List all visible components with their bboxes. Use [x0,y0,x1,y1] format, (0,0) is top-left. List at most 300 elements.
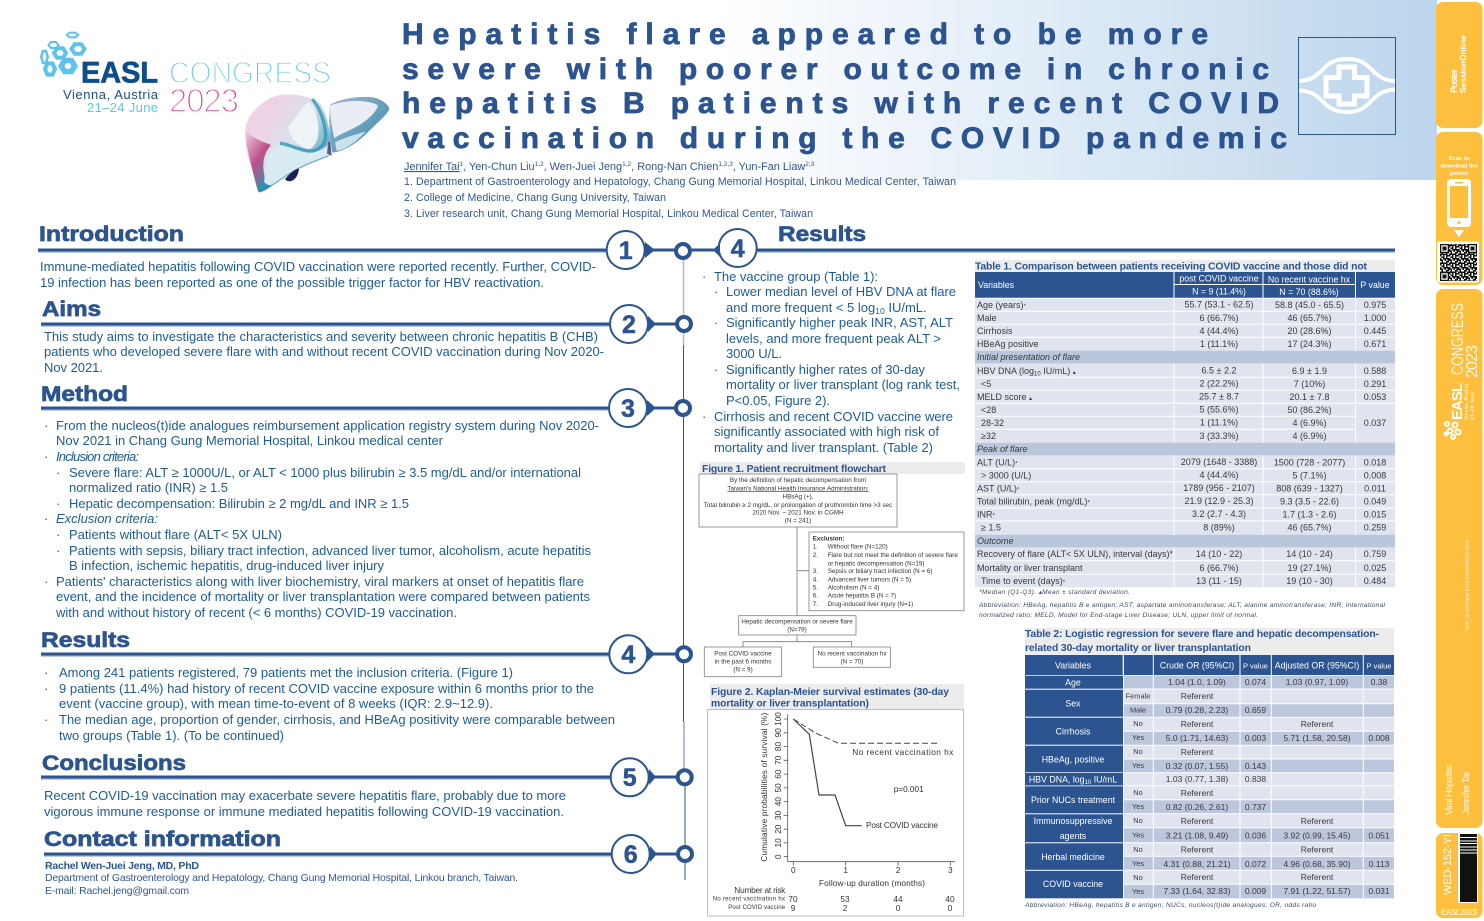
sidebar year: 2023 [1464,345,1481,378]
sidebar author: Jennifer Tai [1461,772,1471,815]
table 1 variable column: <28 [981,405,996,415]
barcode [1458,833,1478,903]
table 2 crude OR column: 5.0 (1.71, 14.63) [1166,733,1228,743]
text block: results continued: · [702,269,706,284]
text block: results [44,665,615,743]
table 1 variable column: > 3000 (U/L) [981,470,1031,480]
table 1 variable column: IU/mL) [1041,366,1073,376]
badge 6: 6 [624,841,638,869]
table 1 post COVID vaccine column: 21.9 (12.9 - 25.3) [1184,496,1254,506]
text block: results: Among 241 patients registered, 79 patients met the inclusion criteria. (Figure 1) [59,665,513,680]
text block: results continued: P<0.05, Figure 2). [726,393,830,408]
table 1 no recent vaccine column: 5 (7.1%) [1292,470,1327,480]
flowchart box: no recent vaccination: No recent vaccination hx [818,650,887,657]
table 1 post COVID vaccine column: 14 (10 - 22) [1196,549,1242,559]
flowchart box: post COVID vaccine: (N = 9) [733,666,753,673]
flowchart box: exclusion: 1. [813,544,818,551]
table 1 post COVID vaccine column: 3.2 (2.7 - 4.3) [1192,509,1246,519]
text block: conclusions: Recent COVID-19 vaccination may exacerbate severe hepatitis flare, probably due to more [44,788,566,803]
table 2 crude p value column: 0.074 [1245,677,1266,687]
table 2 variable column: HBeAg, positive [1042,754,1104,764]
sidebar panel: poster session online [1436,2,1482,128]
section: Introduction [39,223,596,290]
title [402,18,1287,155]
text block: results continued: Significantly higher rates of 30-day [726,362,926,377]
table 2 crude OR column: 1.04 (1.0, 1.09) [1168,677,1226,687]
table 2 crude p value column: 0.659 [1245,705,1266,715]
table 2 variable column: agents [1060,831,1087,841]
table 2 subgroup column [1126,692,1150,896]
table 2 crude p value column: 0.737 [1245,802,1266,812]
number at risk table: 44 [893,894,903,904]
text block: results: 9 patients (11.4%) had history of recent COVID vaccine exposure within 6 months prior to the [59,681,594,696]
table 2 crude p value column: 0.838 [1245,774,1266,784]
number at risk table: 2 [843,903,848,913]
section: Method [41,383,599,620]
badge 2 [610,305,691,343]
icon: hospital logo [1298,38,1396,134]
logo wordmark EASL: EASL [81,56,158,90]
table 2 adjusted p value column [1368,677,1390,896]
number at risk table [713,885,955,913]
table 1 variable column: INR* [977,510,996,520]
text block: results continued: · [714,315,718,330]
table 2 adjusted OR column: 5.71 (1.58, 20.58) [1283,733,1351,743]
text block: results continued: Cirrhosis and recent COVID vaccine were [714,409,953,424]
table 1 no recent vaccine column: 46 (65.7%) [1287,522,1332,532]
flowchart box: eligibility: Taiwan's National Health Insurance Administration: [727,485,869,492]
table 1 header: P value [1360,280,1390,290]
table 2 footnote: Abbreviation: HBeAg, hepatitis B e antigen; NUCs, nucleos(t)ide analogues; OR, odds ratio [1024,902,1316,909]
table 1 no recent vaccine column: 1500 (728 - 2077) [1274,458,1345,468]
table 1 post COVID vaccine column: 2079 (1648 - 3388) [1181,457,1257,467]
table 2 variable column: Herbal medicine [1041,852,1105,862]
flowchart box: exclusion: 3. [813,568,818,575]
table 1 post COVID vaccine column: 4 (44.4%) [1199,470,1239,480]
table 1 title: Table 1. Comparison between patients receiving COVID vaccine and those did not [975,262,1368,272]
text block: method: Exclusion criteria: [56,511,158,526]
table 1 p value column: 0.049 [1364,496,1386,506]
text block: method: · [56,496,60,511]
text block: method: Nov 2021 in Chang Gung Memorial Hospital, Linkou medical center [56,433,444,448]
text block: method: with and without history of recent (< 6 months) COVID-19 vaccination. [55,605,457,620]
flowchart box: post COVID vaccine: in the past 6 months [715,658,771,665]
text block: results continued [702,269,960,455]
text block: results continued: Lower median level of HBV DNA at flare [726,284,956,299]
authors and affiliations: 1 [460,161,464,168]
y axis tick labels: 60 [773,769,783,779]
table 2 subgroup column: Yes [1132,859,1144,868]
table 1 footnotes [978,589,1386,619]
sidebar hexagon logo [1444,422,1460,439]
number at risk table: 40 [945,894,955,904]
badge 4 right column: 4 [731,235,745,263]
y axis tick labels: 100 [773,712,783,726]
text block: method: · [44,574,48,589]
flowchart box: included: Hepatic decompensation or severe flare [741,618,853,625]
text block: method: · [56,465,60,480]
table 1 variable column: 28-32 [981,418,1004,428]
text block: method: Patients' characteristics along with liver biochemistry, viral markers at onset of hepatitis flare [56,574,584,589]
flowchart box: no recent vaccination: (N = 70) [841,658,863,665]
heading: Aims: Aims [42,298,101,321]
table 1 variable column: ▴ [1073,370,1076,376]
table 1 post COVID vaccine column: 25.7 ± 8.7 [1199,392,1239,402]
table 1 variable column: Time to event (days)* [981,576,1066,586]
table 1 variable column: Cirrhosis [977,326,1013,336]
flowchart box: exclusion: 5. [813,585,818,592]
text block: method: · [56,543,60,558]
text block: results: · [44,712,48,727]
text block: results continued: The vaccine group (Table 1): [714,269,878,284]
table 2 adjusted OR column: 4.96 (0.68, 35.90) [1283,859,1351,869]
table 2 title: Table 2: Logistic regression for severe flare and hepatic decompensation- [1025,629,1380,640]
table 1 variable column: MELD score ▴ [977,392,1032,402]
table 1 no recent vaccine column: 6.9 ± 1.9 [1292,366,1327,376]
table 2 body background [1123,655,1394,898]
table 2 header: Adjusted OR (95%CI) [1275,660,1359,670]
figure 1 heading [700,462,965,475]
table 1 variable column: Age (years)* [977,300,1027,310]
table 2 header: Variables [1055,660,1092,670]
authors and affiliations: 1,2 [535,161,544,168]
table 1 p value column: 0.291 [1364,379,1386,389]
flowchart connectors [743,527,852,647]
x axis tick labels [791,865,953,875]
number at risk table: 0 [948,903,953,913]
table 1 post COVID vaccine column: 5 (55.6%) [1199,404,1239,414]
numbered badges [607,229,757,873]
table 1 post COVID vaccine column: 1789 (956 - 2107) [1183,483,1255,493]
heading: Results: Results [41,629,130,652]
heading: Contact information: Contact information [44,828,281,851]
table 2 crude OR column: 1.03 (0.77, 1.38) [1166,774,1228,784]
logo word CONGRESS: CONGRESS [169,55,331,90]
table 2 subgroup column: Yes [1132,830,1144,840]
y axis tick labels [773,712,783,859]
flowchart box: no recent vaccination [813,647,890,667]
table 2 variable column: Immunosuppressive [1034,816,1112,826]
y axis title: Cumulative probabilities of survival (%) [759,712,769,862]
table 1 variable column: Male [977,313,997,323]
table 2 crude OR column: 3.21 (1.08, 9.49) [1166,830,1228,840]
table 1 post COVID vaccine column: 6 (66.7%) [1199,563,1239,573]
table 1 post COVID vaccine column [1181,300,1257,586]
text block: results continued: 3000 U/L. [726,346,782,361]
badge 2: 2 [622,311,636,339]
curve label: post COVID vaccine: Post COVID vaccine [866,820,938,830]
curve: post COVID vaccine [793,719,862,826]
text block: method: Patients with sepsis, biliary tract infection, advanced liver tumor, alcoholism, acute hepatitis [69,543,592,558]
text block: results continued: Significantly higher peak INR, AST, ALT [726,315,953,330]
number at risk table: Number at risk [734,885,786,895]
table 1 post COVID vaccine column: 3 (33.3%) [1199,431,1239,441]
authors and affiliations: 1. Department of Gastroenterology and Hepatology, Chang Gung Memorial Hospital, Linkou Medical Center, Taiwan [404,176,956,188]
badge 5: 5 [623,764,637,792]
table 1 no recent vaccine column [1274,300,1345,586]
table 2 subgroup column: Yes [1132,887,1144,896]
table 2 crude OR column: Referent [1181,691,1214,701]
sidebar panel: poster session online: SessionOnline [1458,35,1468,93]
table 2 adjusted OR column: Referent [1301,872,1334,882]
flowchart box: exclusion: Drug-induced liver injury (N=1) [828,601,913,608]
sidebar panel: congress details [1436,289,1482,828]
flowchart box: included [739,616,856,635]
flowchart box: exclusion: or hepatic decompensation (N=19) [828,560,924,567]
table 2 crude OR column: Referent [1181,844,1214,854]
table 2 subgroup column: No [1133,816,1143,825]
authors and affiliations: 1,2,3 [718,161,733,168]
table 2 crude OR column: 7.33 (1.64, 32.83) [1163,886,1231,896]
badge 3: 3 [621,395,635,423]
sidebar DOI: DOI: 10.3252/pos.EASLCONGRESS.2023 [1464,540,1470,630]
table 2 adjusted OR column: Referent [1301,719,1334,729]
sidebar EASL: EASL [1449,383,1466,420]
table 2 variable column [1025,676,1123,898]
text block: results continued: · [714,362,718,377]
table 1 no recent vaccine column: 58.8 (45.0 - 65.5) [1275,300,1344,310]
table 1 header: Variables [978,280,1015,290]
authors and affiliations: Jennifer Tai [404,161,460,173]
text block: results continued: IU/mL. [885,300,927,315]
figure 1: recruitment flowchart [699,462,965,677]
text block: contact: Rachel Wen-Juei Jeng, MD, PhD [45,860,199,872]
curve label: no recent vaccination: No recent vaccination hx [852,747,954,757]
flowchart box: exclusion: Advanced liver tumors (N = 5) [828,576,911,583]
table 1 variable column: Peak of flare [977,444,1028,454]
table 1 no recent vaccine column: 19 (10 - 30) [1286,576,1333,586]
table 1 no recent vaccine column: 4 (6.9%) [1292,418,1327,428]
text block: method: From the nucleos(t)ide analogues reimbursement application registry system during Nov 2020- [56,418,599,433]
table 1 footnotes: normalized ratio; MELD, Model for End-stage Liver Disease; ULN, upper limit of normal. [979,612,1258,619]
authors and affiliations: 2. College of Medicine, Chang Gung University, Taiwan [404,192,666,204]
table 1 p value column [1364,300,1386,586]
p value: p=0.001 [894,784,924,794]
table 1 no recent vaccine column: 46 (65.7%) [1287,313,1332,323]
table 2 subgroup column: No [1133,845,1143,854]
table 2 variable column: 10 [1085,780,1092,786]
flowchart box: included: (N=79) [787,626,807,633]
flowchart box: eligibility: (N = 241) [785,518,811,525]
table 1 header: N = 70 (88.6%) [1279,287,1339,297]
table 2 crude p value column: 0.143 [1245,761,1266,771]
icon: down arrow [1454,230,1464,238]
table 1 variable column: ≥ 1.5 [981,522,1001,532]
y axis tick labels: 90 [773,728,783,737]
authors and affiliations: , Yun-Fan Liaw [733,161,805,173]
number at risk table: Post COVID vaccine [728,905,786,911]
flowchart box: eligibility: 2020 Nov. ~ 2021 Nov. in CGMH [752,510,844,517]
table 2 title [1025,628,1394,655]
number at risk table: 53 [840,894,850,904]
flowchart box: exclusion [809,532,964,611]
x axis title: Follow-up duration (months) [819,878,925,888]
table 1 variable column: <5 [981,379,991,389]
flowchart box: eligibility: Total bilirubin ≥ 2 mg/dL, or prolongation of prothrombin time >3 sec [704,502,892,509]
text block: results: The median age, proportion of gender, cirrhosis, and HBeAg positivity were comparable between [59,712,615,727]
y axis tick labels: 80 [773,742,783,751]
table 2 crude p value column: 0.072 [1245,859,1266,869]
table 1 p value column: 0.037 [1364,418,1386,428]
figure 1 heading: Figure 1. Patient recruitment flowchart [702,464,887,475]
table 1 p value column: 0.018 [1364,458,1386,468]
table 1 footnotes: Abbreviation: HBeAg, hepatitis B e antigen; AST, aspartate aminotransferase; ALT, alanine aminotransferase; INR, international [978,602,1386,609]
authors and affiliations: , Rong-Nan Chien [631,161,718,173]
scan caption: download the [1440,164,1478,170]
poster number: WED-152-YI [1442,834,1454,895]
table 2 subgroup column: Yes [1132,802,1144,811]
heading: Conclusions: Conclusions [42,752,186,775]
table 2 crude OR column: Referent [1181,788,1214,798]
table 1 variable column: Outcome [977,536,1014,546]
table 1 no recent vaccine column: 4 (6.9%) [1292,431,1327,441]
table 2 adjusted OR column: Referent [1301,816,1334,826]
table 2 adjusted p value column: 0.051 [1368,830,1390,840]
table 1 p value column: 0.484 [1364,576,1386,586]
table 2 crude OR column [1163,677,1231,896]
x axis tick labels: 2 [896,865,901,875]
chart frame [708,710,964,916]
table 2 subgroup column: Male [1130,706,1146,714]
heading: Results continued: Results [778,223,866,246]
text block: introduction: 19 infection has been reported as one of the possible trigger factor for HBV reactivation. [40,275,544,290]
table 1 p value column: 0.759 [1364,549,1386,559]
text block: method: Patients without flare (ALT< 5X ULN) [69,527,282,542]
conference tag: EASL2023 [1441,908,1478,917]
table 2 adjusted p value column: 0.113 [1369,859,1390,869]
text block: results: · [44,665,48,680]
text block: method: normalized ratio (INR) ≥ 1.5 [69,480,228,495]
table 1 no recent vaccine column: 20.1 ± 7.8 [1290,392,1329,402]
table 1 post COVID vaccine column: 6 (66.7%) [1199,313,1239,323]
table 1 p value column: 0.015 [1364,510,1386,520]
sidebar panel: poster session online: Poster [1449,69,1459,93]
heading: Method: Method [41,383,128,406]
table 1 p value column: 0.008 [1364,470,1386,480]
table 1 variable column [977,300,1173,586]
sidebar panel: scan to download [1436,132,1482,285]
number at risk table: 9 [791,903,796,913]
table 2 subgroup column: No [1133,747,1143,756]
text block: results continued: 10 [875,306,885,316]
text block: method: Severe flare: ALT ≥ 1000U/L, or ALT < 1000 plus bilirubin ≥ 3.5 mg/dL and/or international [69,465,581,480]
table 1 post COVID vaccine column: 2 (22.2%) [1199,378,1239,388]
text block: results continued: · [714,284,718,299]
flowchart box: exclusion: 4. [813,576,818,583]
text block: aims [44,329,604,375]
table 1 variable column: 10 [1034,372,1041,378]
y axis tick labels: 20 [773,824,783,834]
number at risk table: 0 [896,903,901,913]
table 2 variable column: COVID vaccine [1043,879,1103,889]
text block: results continued: and more frequent < 5 log [726,300,875,315]
table 2 variable column: Cirrhosis [1056,726,1091,736]
flowchart box: post COVID vaccine: Post COVID vaccine [714,650,772,657]
badge 3 [609,389,690,427]
table 2 adjusted OR column: 3.92 (0.99, 15.45) [1283,830,1351,840]
logo: EASL Congress 2023 [41,33,331,119]
table 2 adjusted p value column: 0.008 [1368,733,1390,743]
text block: method: · [56,527,60,542]
text block: conclusions [44,788,566,819]
title: Hepatitis flare appeared to be more [402,18,1208,51]
table 1 header: N = 9 (11.4%) [1192,286,1246,296]
text block: contact: E-mail: Rachel.jeng@gmail.com [45,886,189,897]
table 2 subgroup column: No [1133,873,1143,882]
scan caption [1440,156,1478,177]
table 1 body background [975,298,1395,587]
table 2 header [1025,655,1394,675]
timeline connector [38,250,1395,880]
table 2 crude OR column: Referent [1181,816,1214,826]
sidebar location [1464,384,1476,420]
table 2 header: P value [1243,662,1268,670]
text block: introduction: Immune-mediated hepatitis following COVID vaccination were reported recently. Further, COVID- [40,259,596,274]
table 1 post COVID vaccine column: 6.5 ± 2.2 [1202,366,1236,376]
section: Contact information [44,828,518,897]
authors and affiliations: 3. Liver research unit, Chang Gung Memorial Hospital, Linkou Medical Center, Taiwan [404,208,813,220]
flowchart box: exclusion: 7. [813,601,818,608]
table 1 p value column: 0.025 [1364,563,1386,573]
sidebar CONGRESS wordmark: CONGRESS [1448,303,1467,375]
illustration: liver [245,94,389,192]
scan caption: poster [1450,171,1469,177]
table 1 header: No recent vaccine hx [1268,274,1351,284]
table 2 adjusted OR column: 1.03 (0.97, 1.09) [1286,677,1348,687]
logo location: Vienna, Austria [63,87,159,102]
table 2 subgroup column: Yes [1132,761,1144,770]
table 1 no recent vaccine column: 50 (86.2%) [1287,405,1332,415]
text block: method: B infection, ischemic hepatitis, drug-induced liver injury [69,558,384,573]
section: Aims [42,298,604,375]
table 1 [975,260,1395,619]
title: severe with poorer outcome in chronic [402,53,1269,86]
flowchart box: exclusion: Acute hepatitis B (N = 7) [828,593,896,600]
x axis tick labels: 0 [791,865,796,875]
QR code [1437,242,1479,282]
scan caption: Scan to [1449,156,1470,162]
flowchart box: eligibility: By the definition of hepatic decompensation from [730,477,866,484]
table 2 crude OR column: Referent [1181,872,1214,882]
table 2 subgroup column: No [1133,788,1143,797]
y axis tick labels: 0 [773,854,783,859]
chart axes [784,714,955,866]
table 2 subgroup column: No [1133,719,1143,728]
flowchart box: exclusion: Flare but not meet the definition of severe flare [828,552,958,559]
sidebar location: 21–24 June [1470,392,1476,420]
y axis tick labels: 70 [773,755,783,765]
heading: Introduction: Introduction [39,223,184,246]
figure 2 heading [710,684,964,710]
figure 2 heading: Figure 2. Kaplan-Meier survival estimates (30-day [711,687,949,698]
flowchart box: exclusion: 6. [813,593,818,600]
text block: method: event, and the incidence of mortality or liver transplantation were compared between patients [56,589,590,604]
table 2 crude OR column: 4.31 (0.88, 21.21) [1163,859,1231,869]
icon: phone [1447,179,1471,227]
authors and affiliations: 1,2 [622,161,632,168]
table 1 variable column: ALT (U/L)* [977,458,1018,468]
table 1 p value column: 1.000 [1364,313,1386,323]
x axis tick labels: 1 [843,865,848,875]
table 1 no recent vaccine column: 7 (10%) [1294,379,1325,389]
table 2 crude p value column: 0.009 [1245,886,1266,896]
badge 1 [607,231,690,269]
table 1 post COVID vaccine column: 4 (44.4%) [1199,326,1239,336]
table 2 crude p value column: 0.036 [1245,830,1266,840]
table 1 variable column: Total bilirubin, peak (mg/dL)* [977,496,1091,506]
text block: results continued: significantly associated with high risk of [714,424,939,439]
authors and affiliations: , Wen-Juei Jeng [544,161,622,173]
